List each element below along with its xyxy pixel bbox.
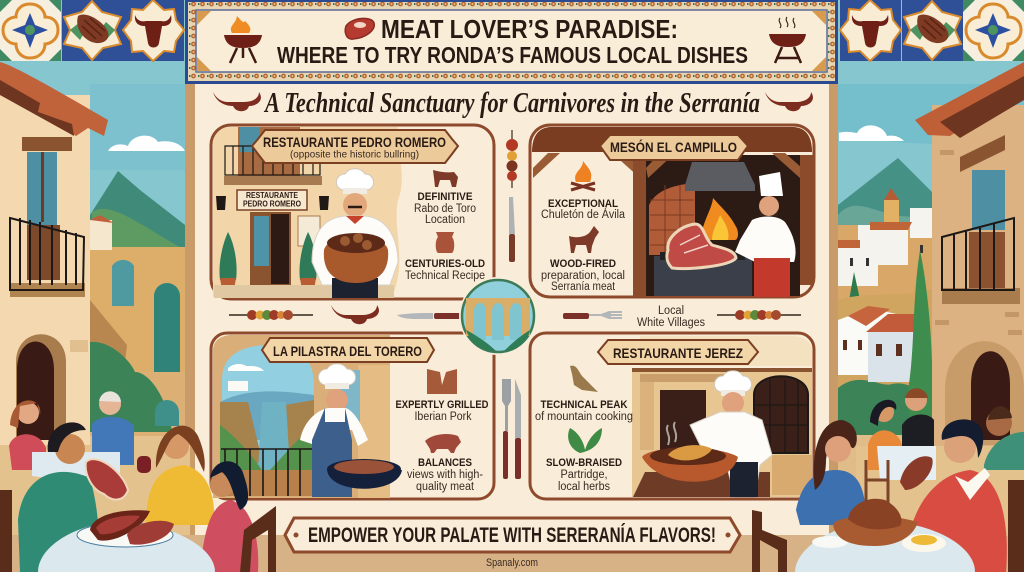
scene: clouds [108,125,904,151]
text: exceptional [541,198,626,221]
tile row: left [0,0,184,61]
text: centuries-old: CENTURIES-OLD [405,258,485,270]
scene: stone facade [632,336,812,497]
icon: campfire [571,161,595,190]
title text: WHERE TO TRY RONDA’S FAMOUS LOCAL DISHES [277,42,748,68]
text: technical peak: of mountain cooking [535,411,633,423]
icon: pig [425,434,461,453]
text: exceptional: Chuletón de Ávila [541,208,626,221]
divider: vertical skewer and knife [506,130,518,262]
text: slow-braised: local herbs [558,481,610,493]
panel: Restaurante Pedro Romero [211,125,494,299]
text: definitive: Rabo de Toro [414,203,476,215]
icon: partridge [570,366,598,392]
banner: panel 1 name [252,130,458,163]
diners: right group [752,388,1024,572]
call to action banner: EMPOWER YOUR PALATE WITH SERERANÍA FLAVORS! [308,524,716,547]
text: wood-fired [541,258,625,293]
text: slow-braised: Partridge, [560,469,608,481]
text: balances: views with high- [407,469,483,481]
text: wood-fired: Serranía meat [551,281,616,293]
icon: gorge [427,369,457,394]
banner: panel 4 name: RESTAURANTE JEREZ [613,345,743,361]
tile row: right [840,0,1024,61]
text: slow-braised: SLOW-BRAISED [546,457,622,469]
text: balances: BALANCES [418,457,472,469]
icon: goat [569,226,599,253]
text: definitive: DEFINITIVE [418,191,472,203]
text: slow-braised [546,457,622,493]
icon: steak [345,18,374,39]
medallion: Puente Nuevo [459,277,537,355]
icon: clay jar [436,232,454,253]
scene: right stone house [915,62,1024,545]
chef with pot [312,169,398,298]
scene: right mountains and white village [838,158,935,540]
text: definitive: Location [425,214,465,226]
text: balances [407,457,483,493]
chef at barbecue [300,364,402,497]
text: wood-fired: WOOD-FIRED [550,258,616,270]
panel: Restaurante Jerez [530,333,814,499]
banner: panel 1 name: RESTAURANTE PEDRO ROMERO [263,134,446,150]
banner: panel 3 name [262,338,434,362]
credit: Spanaly.com [486,557,538,569]
title text: MEAT LOVER’S PARADISE: [381,14,678,44]
scene: grill room [532,127,813,297]
scene: restaurant facade: RESTAURANTE [246,191,299,200]
scene: left house [0,62,108,495]
banner: panel 3 name: LA PILASTRA DEL TORERO [273,343,422,359]
divider: vertical fork and knife [502,379,521,479]
decorative row: right utensils and caption [563,305,801,329]
text: wood-fired: preparation, local [541,270,625,282]
icon: flaming grill left [224,16,262,63]
text: expertly grilled: Iberian Pork [414,411,472,423]
banner: panel 1 name: (opposite the historic bullring) [290,148,419,160]
chef at the grill [735,172,796,297]
banner: panel 2 name: MESÓN EL CAMPILLO [610,138,737,155]
text: centuries-old [405,258,485,282]
panel: Mesón El Campillo [530,125,814,297]
text: technical peak [535,399,633,423]
banner: panel 4 name [598,340,758,364]
text: definitive [414,191,476,226]
text: exceptional: EXCEPTIONAL [548,198,618,210]
chef with braising pot [642,371,772,497]
text: expertly grilled [396,399,489,423]
panel: La Pilastra del Torero [211,333,494,499]
icon: herbs [568,428,602,453]
text: expertly grilled: EXPERTLY GRILLED [396,399,489,411]
scene: arch with gorge view [213,335,390,498]
scene: restaurant facade: PEDRO ROMERO [243,200,301,208]
scene: restaurant facade [213,127,402,298]
text: centuries-old: Technical Recipe [405,270,485,282]
banner: panel 2 name [600,135,748,160]
title banner [185,0,838,84]
subtitle: A Technical Sanctuary for Carnivores in the Serranía [263,88,760,119]
diners: left group [0,391,276,572]
icon: smoking grill right [769,17,806,63]
scene: left mountains and Ronda bridge [90,171,186,536]
central panel [185,84,838,535]
text: balances: quality meat [416,481,475,493]
text: technical peak: TECHNICAL PEAK [540,399,628,411]
decorative row: right utensils and caption: Local [658,305,684,317]
title text [277,14,748,68]
decorative row: right utensils and caption: White Villages [637,317,705,329]
decorative row: left utensils [229,305,461,324]
floor [0,532,1024,572]
icon: bull [433,170,458,187]
call to action banner [285,518,740,552]
